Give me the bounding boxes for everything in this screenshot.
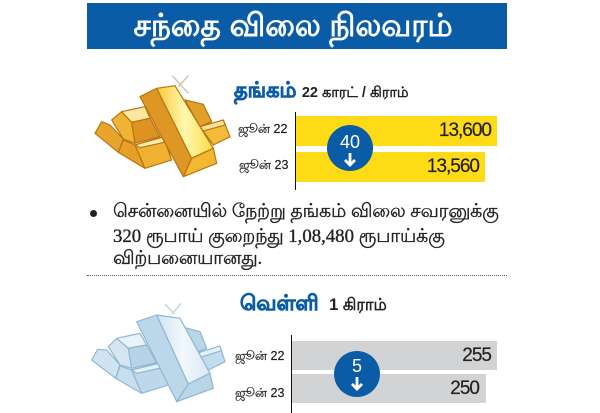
title banner <box>87 3 507 49</box>
gold change badge: 40 <box>340 132 360 152</box>
gold axis line <box>295 112 296 190</box>
gold date labels <box>238 122 288 174</box>
silver heading: வெள்ளி 1 கிராம் <box>240 292 387 315</box>
icon: silver bars <box>91 303 226 402</box>
gold bar June 23: 13,560 <box>427 156 479 177</box>
silver bar June 22 <box>292 341 497 370</box>
dotted divider <box>87 275 507 276</box>
silver date labels: ஜூன் 22 <box>235 349 284 363</box>
icon: down arrow <box>344 153 356 167</box>
gold bar June 22: 13,600 <box>439 120 491 141</box>
silver change badge: 5 <box>352 356 362 376</box>
bullet text <box>90 201 499 270</box>
gold bar June 22 <box>296 116 497 146</box>
bullet text: 320 ரூபாய் குறைந்து 1,08,480 ரூபாய்க்கு <box>113 226 445 247</box>
silver bar June 23: 250 <box>450 378 479 399</box>
silver bar June 22: 255 <box>462 345 491 366</box>
icon: down arrow <box>351 377 363 391</box>
gold date labels: ஜூன் 22 <box>238 122 287 136</box>
silver date labels <box>235 349 284 402</box>
icon: gold bars <box>94 75 231 178</box>
bullet <box>90 210 97 217</box>
gold bar June 23 <box>296 152 485 182</box>
gold change badge <box>327 125 373 171</box>
silver bar June 23 <box>292 374 486 403</box>
silver axis line <box>291 335 292 413</box>
bullet text: விற்பனையானது. <box>113 248 262 269</box>
silver date labels: ஜூன் 23 <box>235 386 284 400</box>
silver change badge <box>334 351 380 397</box>
title banner: சந்தை விலை நிலவரம் <box>133 8 453 43</box>
gold date labels: ஜூன் 23 <box>239 158 288 172</box>
gold heading: தங்கம் 22 காரட் / கிராம் <box>234 79 409 102</box>
bullet text: சென்னையில் நேற்று தங்கம் விலை சவரனுக்கு <box>113 201 499 222</box>
